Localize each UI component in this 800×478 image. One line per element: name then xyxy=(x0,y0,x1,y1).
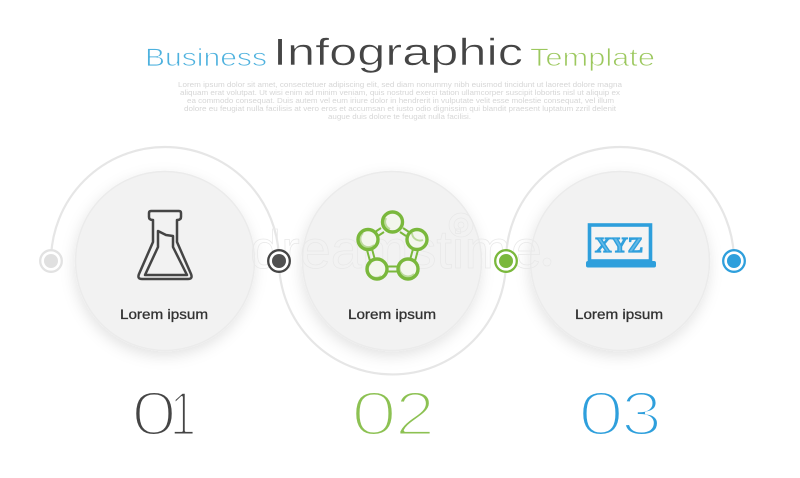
title word: Business: Business xyxy=(145,44,267,72)
node: start xyxy=(40,250,62,272)
number 03 xyxy=(578,380,662,449)
number 03: 3 xyxy=(621,380,662,449)
description text block: Lorem ipsum dolor sit amet, consectetuer adipiscing elit, sed diam nonummy nibh euismod tincidunt ut laoreet dolore magna xyxy=(178,80,623,89)
icon: laptop with XYZ xyxy=(586,225,656,268)
panel: step 1 circle xyxy=(76,172,254,350)
laptop screen text: XYZ xyxy=(595,233,643,257)
label: step 1: Lorem ipsum xyxy=(120,307,208,322)
watermark: dreamstime xyxy=(250,220,542,280)
connecting arcs xyxy=(51,147,734,374)
panel: step 2 circle xyxy=(302,172,482,350)
number 01: 1 xyxy=(170,380,196,449)
title xyxy=(145,32,655,74)
description text block: dolore eu feugiat nulla facilisis at vero eros et accumsan et iusto odio dignissim qui blandit praesent luptatum zzril delenit xyxy=(184,104,616,113)
description text block: aliquam erat volutpat. Ut wisi enim ad minim veniam, quis nostrud exerci tation ullamcorper suscipit lobortis nisl ut aliquip ex xyxy=(180,88,620,97)
title word: Infographic: Infographic xyxy=(273,32,523,74)
description text block: ea commodo consequat. Duis autem vel eum iriure dolor in hendrerit in vulputate velit esse molestie consequat, vel illum xyxy=(187,96,614,105)
number 02 xyxy=(351,380,435,449)
icon: molecule xyxy=(358,212,427,279)
number 03: 0 xyxy=(578,380,624,449)
description text block xyxy=(178,80,623,121)
node: step 3 xyxy=(723,250,745,272)
panel: step 3 circle xyxy=(530,172,710,350)
number 02: 0 xyxy=(351,380,397,449)
label: step 3: Lorem ipsum xyxy=(575,307,663,322)
number 02: 2 xyxy=(395,380,435,449)
node: step 2 xyxy=(495,250,517,272)
number 01: 0 xyxy=(131,380,177,449)
icon: flask xyxy=(138,211,192,279)
title word: Template: Template xyxy=(530,44,655,72)
number 01 xyxy=(131,380,196,449)
description text block: augue duis dolore te feugait nulla facilisi. xyxy=(328,112,471,121)
label: step 2: Lorem ipsum xyxy=(348,307,436,322)
node: step 1 xyxy=(268,250,290,272)
